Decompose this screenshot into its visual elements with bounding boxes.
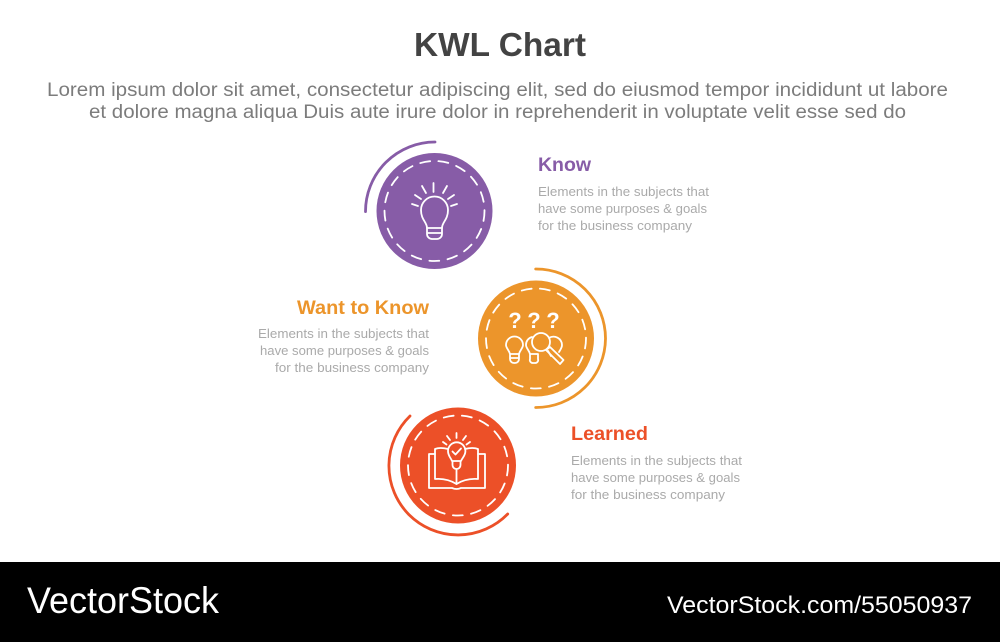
text: learned: Learned [571,424,648,445]
text: know: have some purposes & goals [538,201,708,216]
icon: question marks and bulbs with magnifier: ? [527,308,541,333]
icon: light bulb [412,183,457,239]
footer bar [0,562,1000,642]
icon: open book with bulb [429,433,485,489]
icon: question marks and bulbs with magnifier: ? [508,308,522,333]
node: want to know circle [478,269,606,408]
text: know: Elements in the subjects that [538,184,709,199]
text: want to know: for the business company [275,360,430,375]
node: learned circle [389,408,516,535]
outer arc: know [365,142,435,212]
icon: question marks and bulbs with magnifier [506,308,564,364]
text: know: for the business company [538,218,693,233]
text: know: Know [538,155,591,176]
text: want to know: Elements in the subjects that [258,326,429,341]
subtitle text block: Lorem ipsum dolor sit amet, consectetur adipiscing elit, sed do eiusmod tempor incididunt ut labore [47,80,948,101]
footer logo text: VectorStock [27,580,219,621]
outer arc: learned [389,416,508,535]
text: want to know: Want to Know [297,298,429,319]
footer url: VectorStock.com/55050937 [667,592,972,619]
text: want to know [258,298,430,375]
node: know circle [365,142,492,269]
outer arc: want to know [536,269,606,408]
text: learned: Elements in the subjects that [571,453,742,468]
subtitle text block [47,80,948,123]
text: want to know: have some purposes & goals [260,343,430,358]
title: KWL Chart [414,26,586,63]
text: know [538,155,709,233]
icon: question marks and bulbs with magnifier: ? [546,308,560,333]
text: learned [571,424,742,502]
text: learned: for the business company [571,487,726,502]
subtitle text block: et dolore magna aliqua Duis aute irure dolor in reprehenderit in voluptate velit esse sed do [89,102,906,123]
text: learned: have some purposes & goals [571,470,741,485]
